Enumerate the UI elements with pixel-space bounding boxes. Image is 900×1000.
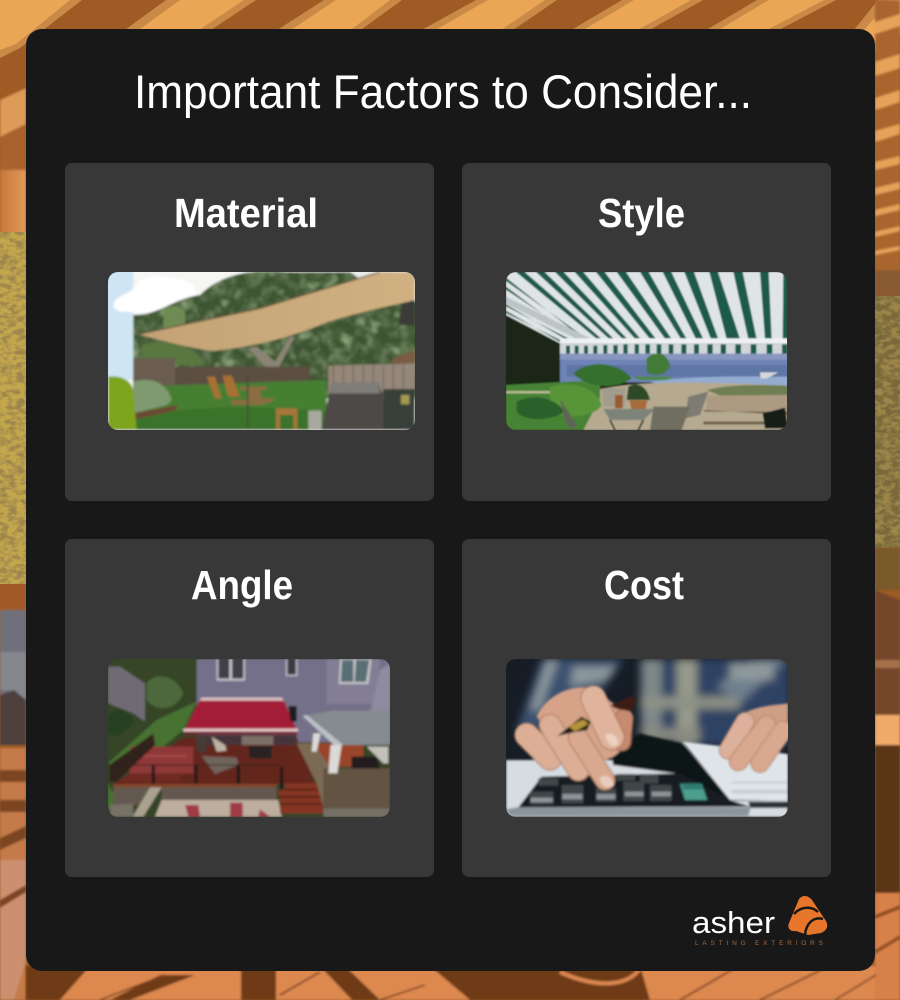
right hand <box>743 703 788 737</box>
logo tagline: LASTING EXTERIORS <box>695 940 824 947</box>
panel: material <box>65 163 434 501</box>
right edge <box>875 0 900 296</box>
photo: striped retractable awning over patio <box>506 272 787 430</box>
top wood slats <box>0 0 900 58</box>
photo: sail shade over backyard <box>108 272 415 430</box>
photo: hands using a calculator <box>506 659 788 817</box>
heading: material: Material <box>174 190 318 236</box>
panel: cost <box>462 539 831 877</box>
left hand <box>537 687 632 760</box>
panel: style <box>462 163 831 501</box>
photo: red awning over deck from above <box>108 659 390 817</box>
heading: angle: Angle <box>191 562 293 608</box>
logo wordmark: asher <box>692 905 775 940</box>
bottom deck with shadows <box>26 966 876 1000</box>
panel: angle <box>65 539 434 877</box>
logo: asher lasting exteriors <box>692 896 828 947</box>
logo mark: orange swoosh <box>788 896 827 935</box>
heading: cost: Cost <box>604 562 684 608</box>
left edge <box>0 88 26 245</box>
heading: style: Style <box>598 190 685 236</box>
